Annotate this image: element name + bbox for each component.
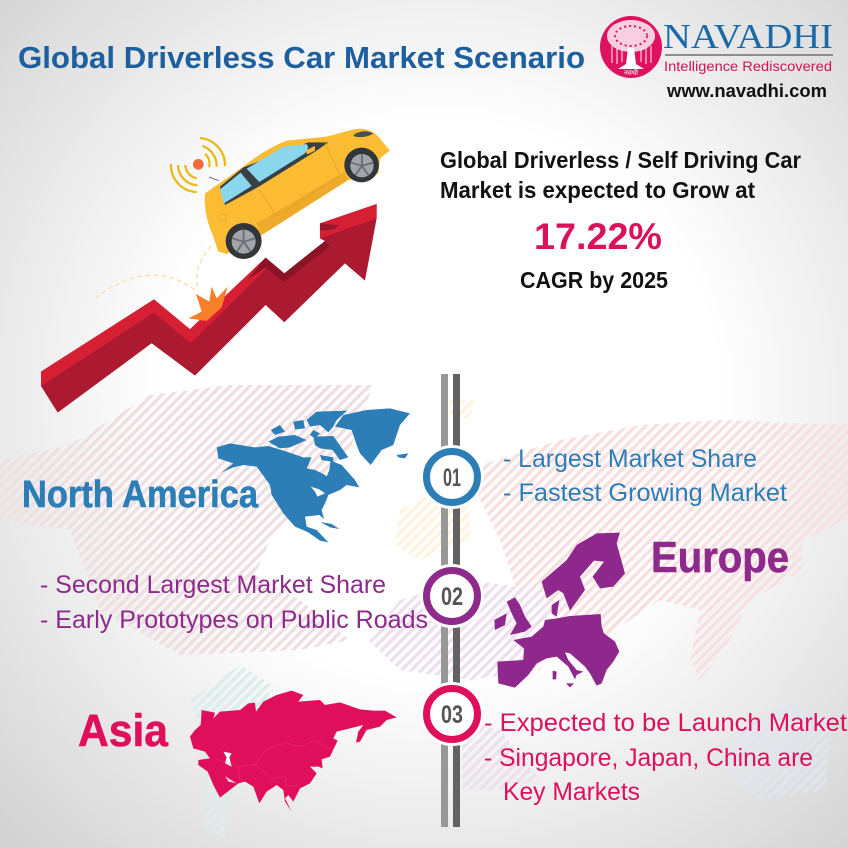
rising red arrow <box>41 204 377 413</box>
marker 03: 03 <box>441 701 463 729</box>
list: Europe points: - Early Prototypes on Public Roads <box>40 606 428 634</box>
marker 02 <box>420 564 484 628</box>
website: www.navadhi.com <box>666 81 827 101</box>
list: Europe points <box>40 571 428 634</box>
faint hatched world map <box>0 385 848 838</box>
list: North America points <box>503 445 787 507</box>
map: North America <box>217 408 410 542</box>
yellow self-driving car <box>205 129 390 259</box>
logo tagline: Intelligence Rediscovered <box>664 58 832 74</box>
icon: wifi signal <box>171 138 225 192</box>
callout text line 3: CAGR by 2025 <box>520 267 668 293</box>
region label: Asia: Asia <box>78 705 169 756</box>
icon: impact burst <box>188 287 228 321</box>
list: Asia points: - Singapore, Japan, China are <box>484 744 813 772</box>
dashed bounce trail <box>95 243 213 298</box>
list: North America points: - Largest Market Share <box>503 445 757 473</box>
logo: Navadhi <box>600 16 833 101</box>
marker 01: 01 <box>443 464 461 492</box>
timeline bars <box>441 374 460 827</box>
list: North America points: - Fastest Growing Market <box>503 479 787 507</box>
logo wordmark: NAVADHI <box>663 17 833 56</box>
callout text line 2: Market is expected to Grow at <box>440 177 755 203</box>
map: Asia <box>190 691 397 812</box>
icon: banyan tree emblem <box>600 16 662 78</box>
marker 02: 02 <box>441 583 463 611</box>
callout text line 1: Global Driverless / Self Driving Car <box>440 147 801 173</box>
list: Asia points: - Expected to be Launch Market <box>484 709 847 737</box>
list: Europe points: - Second Largest Market Share <box>40 571 386 599</box>
figure: 17.22%: 17.22% <box>534 216 662 257</box>
callout: CAGR forecast <box>440 147 801 293</box>
map: Europe <box>494 533 625 688</box>
region label: Europe: Europe <box>651 533 789 582</box>
marker 03 <box>420 682 484 746</box>
title: Global Driverless Car Market Scenario <box>18 40 585 75</box>
region label: North America: North America <box>22 474 259 516</box>
list: Asia points: Key Markets <box>503 778 640 806</box>
marker 01 <box>420 445 484 509</box>
illustration: car on rising arrow <box>41 129 390 413</box>
icon: banyan tree emblem: नवधी <box>624 68 638 77</box>
list: Asia points <box>484 709 847 806</box>
